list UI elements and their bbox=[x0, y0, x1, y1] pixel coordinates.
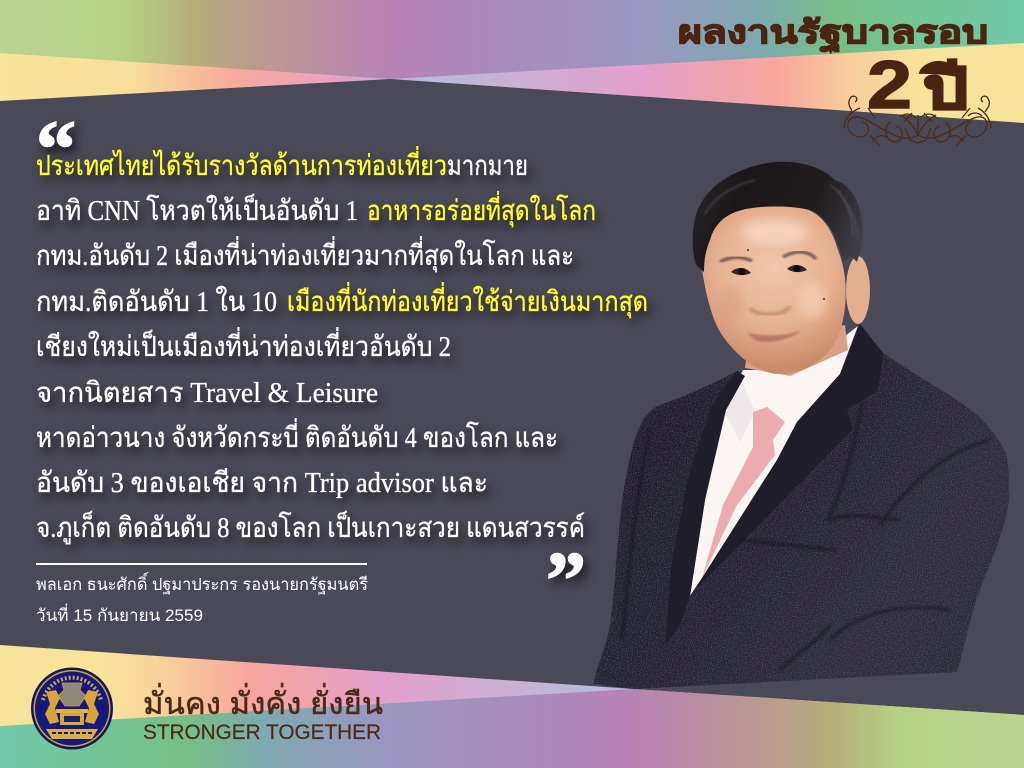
bottom ribbon: pastel band bbox=[0, 645, 1024, 738]
portrait: left lapel bbox=[665, 371, 745, 645]
seal: left guardian lion bbox=[45, 690, 60, 724]
top ribbon: pastel band bbox=[0, 30, 1024, 123]
seal: bowl bbox=[58, 683, 86, 706]
portrait: eyes bbox=[731, 265, 807, 275]
quote line 7: หาดอ่าวนาง จังหวัดกระบี่ ติดอันดับ 4 ของโลก และ bbox=[36, 418, 558, 454]
portrait: tie bbox=[702, 407, 785, 578]
quote line 1: มากมาย bbox=[447, 151, 528, 182]
title word: years: ปี bbox=[921, 57, 968, 120]
portrait: face bbox=[702, 205, 846, 374]
title number: 2: 2 bbox=[867, 47, 912, 123]
quote line 5: เชียงใหม่เป็นเมืองที่น่าท่องเที่ยวอันดับ 2 bbox=[36, 327, 451, 363]
slogan bbox=[143, 683, 383, 744]
quote line 6: จากนิตยสาร Travel & Leisure bbox=[36, 378, 378, 409]
quote line 2: อาหารอร่อยที่สุดในโลก bbox=[367, 191, 596, 228]
quote line 3: กทม.อันดับ 2 เมืองที่น่าท่องเที่ยวมากที่สุดในโลก และ bbox=[36, 236, 574, 273]
slogan: Thai: มั่นคง มั่งคั่ง ยั่งยืน bbox=[143, 683, 383, 721]
attribution bbox=[36, 572, 368, 625]
quote line 4: เมืองที่นักท่องเที่ยวใช้จ่ายเงินมากสุด bbox=[287, 282, 648, 319]
portrait: hair bbox=[693, 162, 863, 272]
portrait: eyebrows bbox=[720, 257, 752, 262]
quote line 2: อาทิ CNN โหวตให้เป็นอันดับ 1 bbox=[36, 193, 358, 227]
seal: lettering ring bbox=[43, 678, 101, 700]
attribution name: พลเอก ธนะศักดิ์ ปฐมาประกร รองนายกรัฐมนตรี bbox=[36, 572, 368, 595]
portrait: right lapel bbox=[690, 324, 883, 596]
icon: government seal bbox=[31, 668, 113, 750]
portrait: forehead highlight bbox=[741, 219, 809, 245]
portrait: cheek highlight bbox=[798, 282, 826, 318]
quote text bbox=[36, 146, 648, 545]
quote line 8: อันดับ 3 ของเอเชีย จาก Trip advisor และ bbox=[36, 467, 488, 499]
ornament: floral flourish bbox=[844, 96, 991, 146]
quote line 9: จ.ภูเก็ต ติดอันดับ 8 ของโลก เป็นเกาะสวย แดนสวรรค์ bbox=[36, 510, 585, 545]
portrait: man in dark suit bbox=[593, 162, 1009, 689]
portrait: ears bbox=[846, 256, 870, 324]
quote mark: opening: “ bbox=[36, 106, 76, 194]
seal: table bbox=[56, 709, 88, 713]
quote line 1: ประเทศไทยได้รับรางวัลด้านการท่องเที่ยว bbox=[36, 146, 447, 182]
attribution date: วันที่ 15 กันยายน 2559 bbox=[36, 603, 203, 625]
seal: right guardian lion bbox=[84, 690, 99, 724]
portrait: neck bbox=[745, 325, 848, 376]
top ribbon: rainbow band bbox=[0, 0, 1024, 79]
slogan: English: STRONGER TOGETHER bbox=[143, 720, 381, 744]
portrait: mouth bbox=[747, 331, 801, 342]
quote mark: closing: ” bbox=[546, 537, 586, 625]
portrait: collar shade bbox=[723, 384, 755, 442]
bottom ribbon: rainbow band bbox=[0, 689, 1024, 768]
title line: ผลงานรัฐบาลรอบ bbox=[678, 14, 988, 53]
portrait: left cheek bbox=[717, 287, 743, 323]
title: government two-year results bbox=[678, 14, 988, 123]
portrait: jacket folds bbox=[622, 402, 990, 670]
portrait: shirt bbox=[690, 326, 858, 596]
seal: bottom ribbon bbox=[46, 729, 98, 739]
portrait: nose bbox=[750, 306, 790, 315]
quote line 4: กทม.ติดอันดับ 1 ใน 10 bbox=[36, 285, 277, 318]
portrait: jacket bbox=[593, 324, 1009, 689]
portrait: moles bbox=[747, 249, 825, 300]
portrait: grey hair streaks bbox=[704, 180, 858, 240]
quote line 4 bbox=[36, 282, 648, 319]
quote line 2 bbox=[36, 191, 596, 228]
